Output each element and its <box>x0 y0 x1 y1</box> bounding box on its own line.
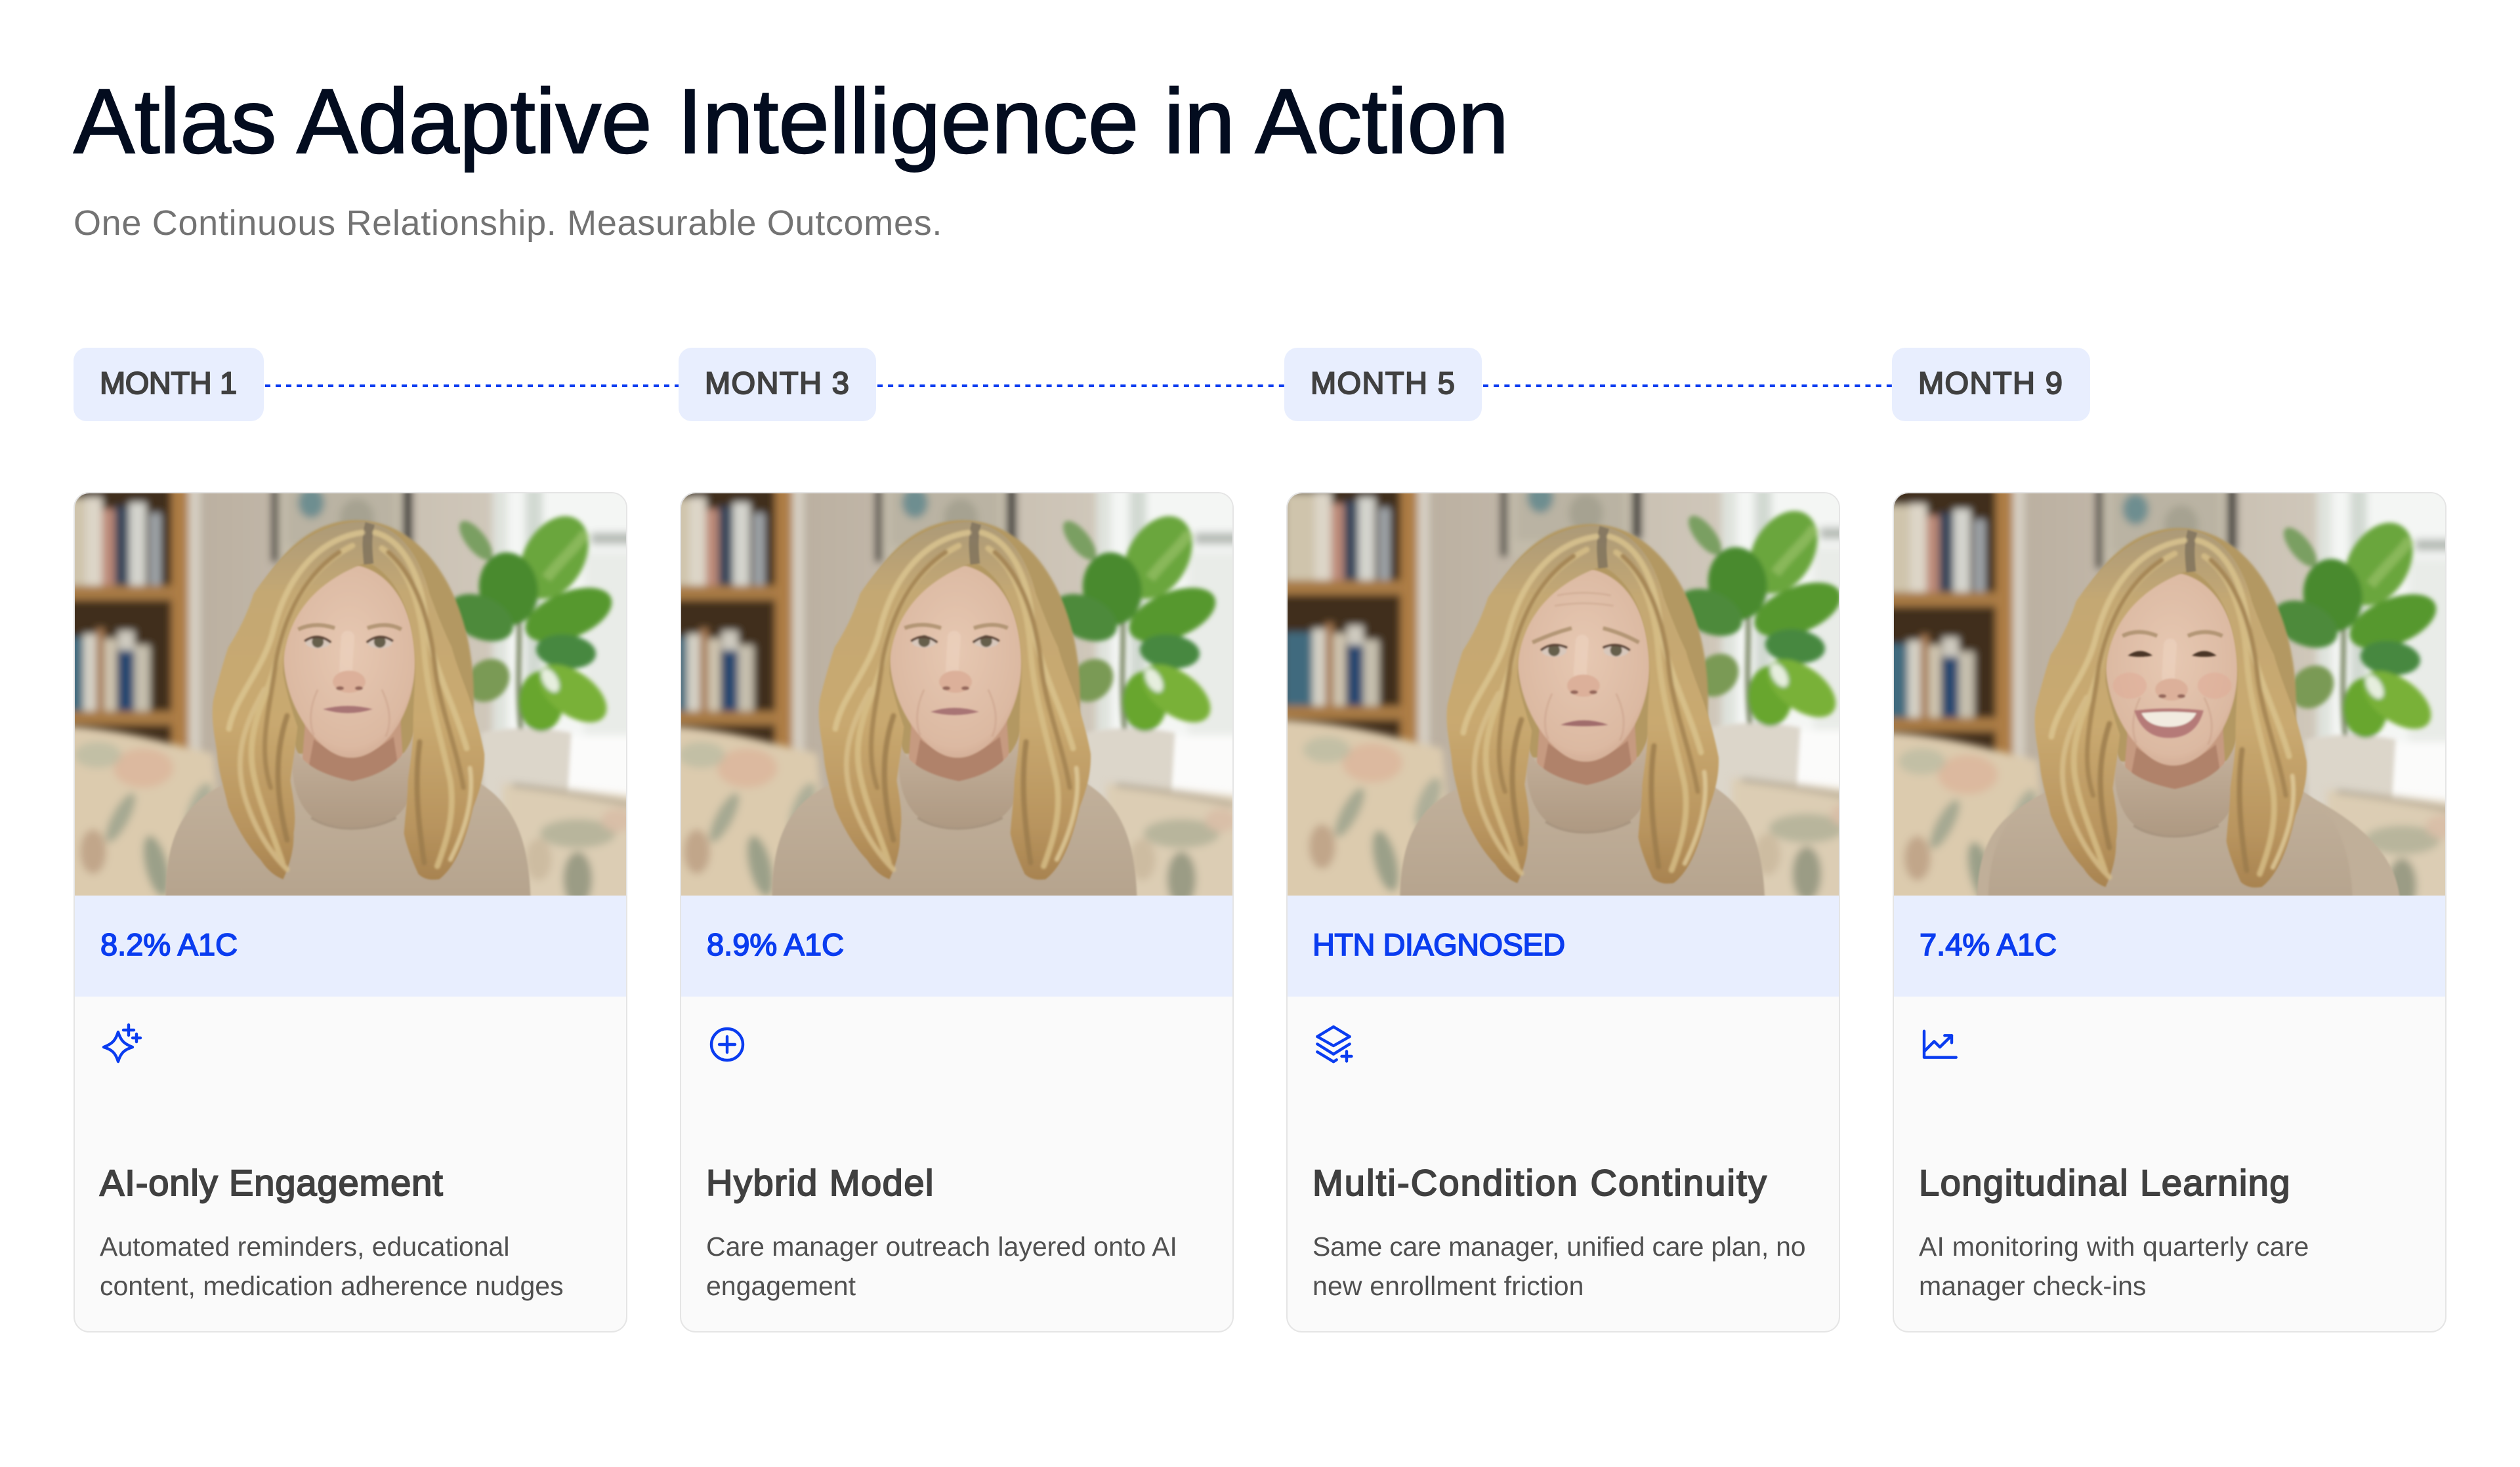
panel: month 3 card <box>680 492 1234 1333</box>
icon: layers plus <box>1316 1025 1353 1063</box>
timeline connector: month 3 to month 5 <box>877 384 1284 387</box>
A1C band: 8.9% A1C <box>707 927 844 962</box>
title: Atlas Adaptive Intelligence in Action <box>74 70 1509 173</box>
card description: Care manager outreach layered onto AI <box>706 1231 1177 1262</box>
timeline tag: month 3 <box>679 348 876 421</box>
card heading: Hybrid Model <box>706 1162 934 1203</box>
photo: smiling expression <box>1894 493 2445 896</box>
card heading: AI-only Engagement <box>100 1162 444 1203</box>
card description <box>1919 1231 2309 1301</box>
A1C band: 7.4% A1C <box>1920 927 2057 962</box>
icon: trend chart <box>1923 1030 1958 1059</box>
card description: new enrollment friction <box>1312 1271 1584 1301</box>
panel: month 5 card <box>1286 492 1840 1333</box>
diagnosis band <box>1288 896 1839 997</box>
icon: sparkles <box>102 1023 142 1063</box>
icon: circle plus <box>710 1027 744 1062</box>
card description: engagement <box>706 1271 856 1301</box>
card description: Automated reminders, educational <box>100 1231 509 1262</box>
photo: neutral, slightly tired expression <box>681 493 1232 896</box>
photo: worried expression <box>1288 493 1839 896</box>
timeline tag: month 5: MONTH 5 <box>1311 365 1456 400</box>
A1C band <box>681 896 1232 997</box>
diagnosis band: HTN DIAGNOSED <box>1312 927 1565 962</box>
card heading: Longitudinal Learning <box>1919 1162 2291 1203</box>
timeline tag: month 3: MONTH 3 <box>705 365 850 400</box>
panel: month 1 card <box>74 492 627 1333</box>
subtitle: One Continuous Relationship. Measurable Outcomes. <box>74 203 942 243</box>
A1C band <box>1894 896 2445 997</box>
timeline tag: month 5 <box>1284 348 1482 421</box>
timeline tag: month 9: MONTH 9 <box>1918 365 2063 400</box>
timeline connector: month 1 to month 3 <box>265 384 679 387</box>
card description <box>100 1231 564 1301</box>
card description: Same care manager, unified care plan, no <box>1312 1231 1805 1262</box>
timeline connector: month 5 to month 9 <box>1483 384 1892 387</box>
timeline tag: month 1: MONTH 1 <box>100 365 237 400</box>
card heading: Multi-Condition Continuity <box>1312 1162 1768 1203</box>
photo: neutral expression <box>75 493 626 896</box>
card description: manager check-ins <box>1919 1271 2146 1301</box>
card description <box>1312 1231 1805 1301</box>
card description: content, medication adherence nudges <box>100 1271 564 1301</box>
A1C band <box>75 896 626 997</box>
timeline tag: month 9 <box>1892 348 2090 421</box>
card description: AI monitoring with quarterly care <box>1919 1231 2309 1262</box>
panel: month 9 card <box>1893 492 2446 1333</box>
A1C band: 8.2% A1C <box>100 927 238 962</box>
timeline tag: month 1 <box>74 348 264 421</box>
card description <box>706 1231 1177 1301</box>
